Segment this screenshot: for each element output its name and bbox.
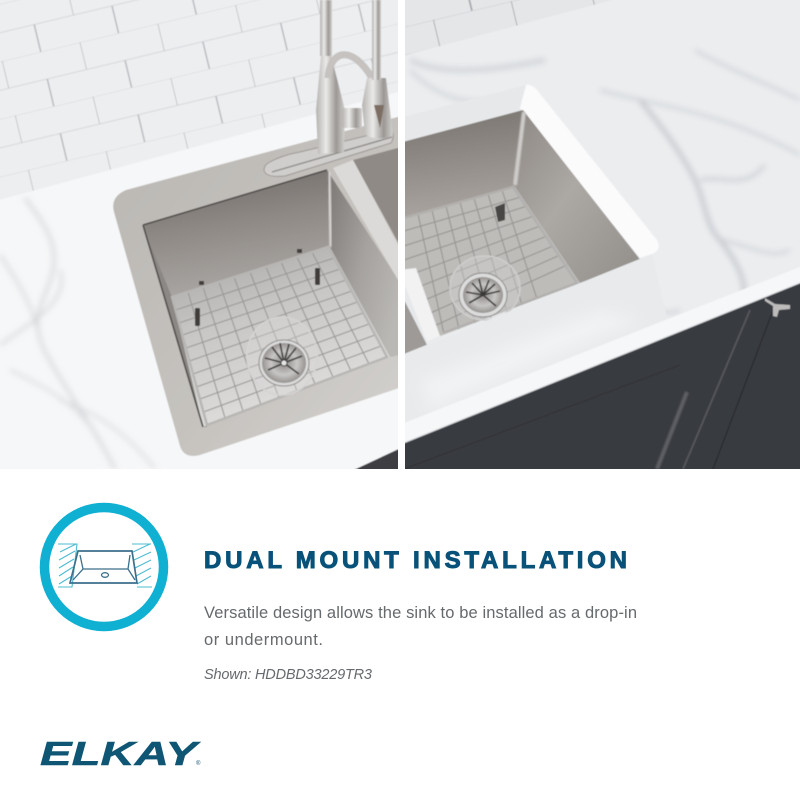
spring right: [372, 0, 381, 80]
heading: DUAL MOUNT INSTALLATION: [204, 547, 627, 574]
right sink grid: [404, 187, 577, 334]
divider strip between bowls: [333, 160, 398, 280]
logo: Elkay: ELKAY: [40, 735, 201, 772]
photo panel: undermount sink: [399, 0, 800, 475]
icon ring: [44, 508, 164, 626]
front counter marble: [399, 254, 668, 425]
divider strip right panel: [405, 268, 440, 341]
cabinet: [399, 281, 800, 475]
spray head: [362, 78, 393, 138]
cabinet door grooves: [404, 310, 772, 469]
left bowl right wall: [327, 170, 405, 357]
marble veins: [0, 198, 155, 469]
description text: [204, 604, 637, 649]
cabinet corner: [354, 448, 398, 469]
left bowl remnant: [405, 301, 428, 354]
description text: or undermount.: [204, 631, 323, 649]
corner highlight: [515, 112, 524, 185]
left sink grid: [172, 247, 387, 425]
drain strainer: [259, 340, 309, 386]
marble countertop: [0, 93, 398, 469]
bowl corner highlight: [329, 172, 331, 247]
subway tile backsplash: [0, 0, 405, 201]
description text: Versatile design allows the sink to be installed as a drop-in: [204, 604, 637, 622]
faucet body left: [316, 55, 345, 154]
right drain glass ring: [450, 256, 520, 320]
faucet gooseneck: [328, 55, 372, 78]
faucet handle: [342, 108, 362, 128]
drain glass ring: [247, 317, 317, 395]
cabinet knob: [765, 298, 790, 317]
left bowl floor: [172, 247, 390, 427]
right marble veins: [410, 50, 798, 315]
bowl top edge shadow: [143, 170, 327, 427]
logo: Elkay: ®: [196, 760, 201, 767]
faucet: [264, 0, 393, 176]
right bowl floor: [399, 187, 580, 336]
right drain strainer: [459, 273, 507, 317]
left bowl left wall: [146, 236, 207, 428]
photo panel: drop-in mount sink: [0, 0, 405, 475]
right bowl back wall: [399, 110, 523, 220]
right subway tile: [405, 0, 596, 56]
icon: dual mount sink in circle: [44, 508, 164, 626]
spring left: [320, 0, 332, 56]
sink rim: [399, 85, 659, 354]
rack feet: [195, 249, 320, 326]
icon hatch: [58, 544, 152, 587]
sink flange: [113, 115, 405, 456]
counter front edge: [399, 265, 800, 445]
model note: Shown: HDDBD33229TR3: [204, 667, 372, 683]
right bowl right wall: [515, 110, 642, 283]
right marble countertop: [405, 0, 800, 344]
logo: Elkay: [40, 735, 201, 772]
front counter patches: [420, 310, 640, 410]
faucet base plate: [264, 130, 393, 176]
right rack clip: [495, 203, 505, 222]
left bowl back wall: [143, 170, 330, 297]
right bowl glimpse: [353, 148, 398, 243]
icon sink outline: [70, 551, 137, 583]
